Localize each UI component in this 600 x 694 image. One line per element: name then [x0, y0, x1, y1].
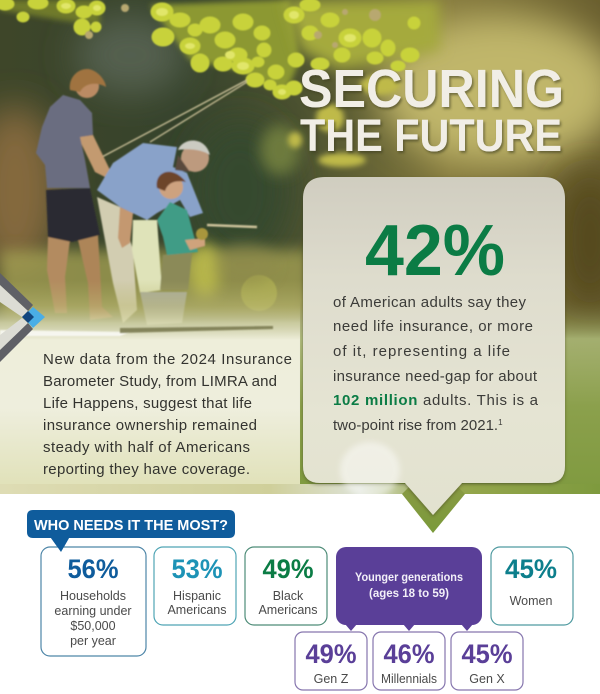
- card: Hispanic Americans: 53%: [172, 554, 222, 584]
- callout body text: of American adults say they: [333, 294, 526, 311]
- card: Women: 45%: [505, 554, 557, 584]
- callout panel: 42% need-gap: [303, 177, 565, 533]
- card: Hispanic Americans: Hispanic: [173, 589, 221, 603]
- panel: younger generations: (ages 18 to 59): [369, 586, 449, 600]
- card: Women: Women: [510, 594, 552, 608]
- card: Gen X: Gen X: [469, 672, 505, 686]
- background photo: family fishing: [0, 0, 600, 494]
- bucket: [140, 292, 187, 325]
- callout body text: of it, representing a life: [333, 343, 510, 360]
- card: Hispanic Americans: Americans: [167, 603, 227, 617]
- man: [36, 69, 113, 320]
- card: households: $50,000: [70, 619, 116, 633]
- callout body text: need life insurance, or more: [333, 318, 533, 335]
- card: Gen Z: 49%: [306, 639, 356, 669]
- card: Women: [491, 547, 573, 625]
- card: Black Americans: Black: [273, 589, 304, 603]
- card: Hispanic Americans: [154, 547, 236, 625]
- callout body text: 102 million adults. This is a: [333, 392, 539, 409]
- grandfather: [97, 140, 210, 323]
- yellow foliage: [0, 0, 440, 167]
- title: Securing the Future: THE FUTURE: [300, 110, 562, 161]
- card: Gen Z: [295, 632, 367, 690]
- big stat: 42%: [365, 211, 505, 291]
- intro text block: steady with half of Americans: [43, 439, 250, 456]
- callout body text: [333, 294, 539, 434]
- title: Securing the Future: SECURING: [299, 59, 564, 119]
- card: Black Americans: 49%: [262, 554, 314, 584]
- fishing rods: [100, 80, 257, 227]
- intro text block: Barometer Study, from LIMRA and: [43, 373, 277, 390]
- card: households: 56%: [68, 554, 118, 584]
- intro text block: Life Happens, suggest that life: [43, 395, 252, 412]
- card: Millennials: 46%: [384, 639, 434, 669]
- intro text block: reporting they have coverage.: [43, 461, 250, 478]
- icon: diamond accent: [0, 273, 45, 362]
- callout body text: 1: [498, 418, 503, 427]
- intro text block: New data from the 2024 Insurance: [43, 351, 292, 368]
- card: Gen Z: Gen Z: [314, 672, 349, 686]
- panel: younger generations: [336, 547, 482, 631]
- card: households: Households: [60, 589, 126, 603]
- intro text block: insurance ownership remained: [43, 417, 257, 434]
- card: Black Americans: [245, 547, 327, 625]
- boy: [157, 172, 208, 290]
- heading tag: who needs it the most: [27, 510, 235, 552]
- card: Gen X: 45%: [462, 639, 512, 669]
- card: households: per year: [70, 634, 116, 648]
- card: Black Americans: Americans: [258, 603, 318, 617]
- card: households: [41, 538, 146, 656]
- card: households: earning under: [54, 604, 132, 618]
- callout body text: two-point rise from 2021.: [333, 417, 498, 434]
- dock: [0, 330, 130, 336]
- card: Gen X: [451, 632, 523, 690]
- people: [36, 69, 257, 325]
- intro text block: [43, 351, 292, 478]
- title: Securing the Future: [299, 59, 564, 161]
- card: Millennials: Millennials: [381, 672, 437, 686]
- heading tag: who needs it the most: WHO NEEDS IT THE MOST?: [34, 517, 228, 534]
- callout body text: insurance need-gap for about: [333, 368, 538, 385]
- panel: younger generations: Younger generations: [355, 570, 463, 584]
- card: Millennials: [373, 632, 445, 690]
